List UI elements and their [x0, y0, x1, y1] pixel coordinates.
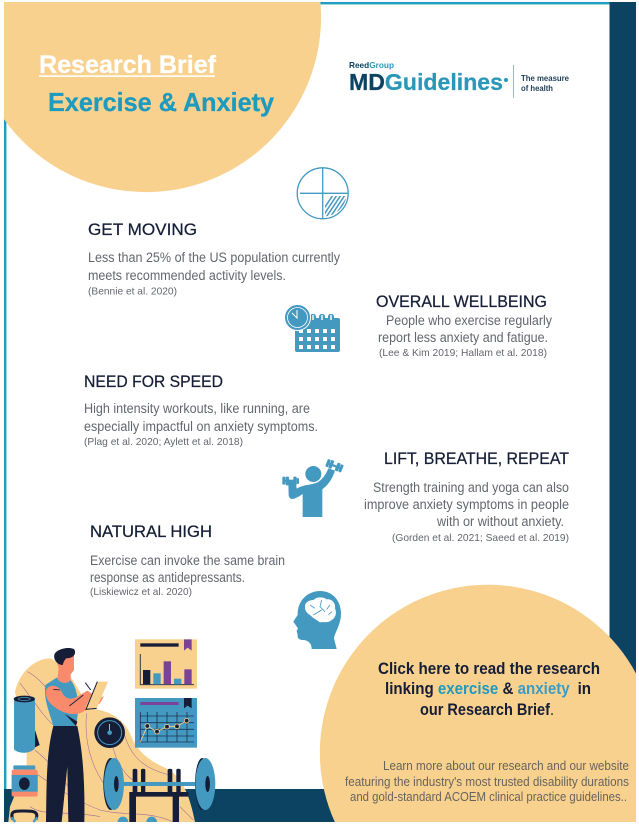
section: get moving: Less than 25% of the US population currently: [88, 250, 340, 265]
section: lift, breathe, repeat: improve anxiety symptoms in people: [364, 497, 569, 512]
section: lift, breathe, repeat: LIFT, BREATHE, REPEAT: [384, 449, 569, 468]
illustration: man with clipboard in gym: [8, 639, 215, 822]
section: get moving: [88, 220, 340, 298]
title: Research Brief: Research Brief: [39, 51, 217, 79]
call to action text: [378, 660, 600, 719]
section: overall wellbeing: [376, 292, 552, 359]
icon: quarter pie chart: [296, 167, 349, 220]
logo: ReedGroup MDGuidelines: MDGuidelines: [349, 69, 503, 95]
section: natural high: (Liskiewicz et al. 2020): [90, 586, 192, 598]
supplement jar: [12, 765, 38, 797]
section: natural high: response as antidepressants.: [90, 570, 245, 585]
yoga mat: [14, 696, 40, 753]
call to action text: Click here to read the research: [378, 660, 600, 678]
logo: ReedGroup MDGuidelines: The measure: [521, 74, 570, 83]
section: natural high: NATURAL HIGH: [90, 522, 212, 541]
man arm and face: [46, 655, 104, 714]
section: get moving: GET MOVING: [88, 220, 197, 239]
section: get moving: (Bennie et al. 2020): [88, 286, 177, 298]
section: need for speed: NEED FOR SPEED: [84, 372, 223, 391]
icon: calendar and clock: [284, 304, 340, 352]
section: need for speed: especially impactful on anxiety symptoms.: [84, 419, 318, 434]
kettlebell: [11, 811, 37, 822]
man shirt: [45, 678, 78, 726]
title: Exercise & Anxiety: Exercise & Anxiety: [48, 87, 275, 117]
call to action text: linking exercise & anxiety in: [385, 680, 591, 698]
section: get moving: meets recommended activity levels.: [88, 268, 286, 283]
icon: head with brain: [293, 591, 341, 649]
section: natural high: Exercise can invoke the same brain: [90, 553, 285, 568]
peach backdrop blob: [8, 658, 195, 822]
arm details: [53, 689, 83, 706]
section: lift, breathe, repeat: (Gorden et al. 2021; Saeed et al. 2019): [392, 532, 569, 544]
peach circle: call to action: [320, 585, 636, 822]
section: lift, breathe, repeat: with or without anxiety.: [436, 514, 564, 529]
section: natural high: [90, 522, 285, 598]
section: lift, breathe, repeat: Strength training and yoga can also: [373, 480, 569, 495]
section: overall wellbeing: People who exercise regularly: [386, 313, 552, 328]
man hair: [54, 648, 75, 665]
icon: person lifting dumbbells: [282, 459, 344, 517]
gauge clock: [94, 717, 125, 748]
man trousers: [46, 726, 84, 822]
closing text block: [345, 758, 629, 804]
section: overall wellbeing: OVERALL WELLBEING: [376, 292, 547, 311]
section: overall wellbeing: (Lee & Kim 2019; Hallam et al. 2018): [379, 347, 547, 359]
contour lines: [20, 672, 193, 822]
bar chart card: [135, 639, 197, 689]
section: lift, breathe, repeat: [364, 449, 569, 544]
section: need for speed: (Plag et al. 2020; Aylett et al. 2018): [84, 436, 243, 448]
logo: ReedGroup MDGuidelines: ReedGroup: [349, 60, 394, 70]
logo: ReedGroup MDGuidelines: [349, 60, 570, 98]
call to action text: our Research Brief.: [420, 701, 554, 719]
barbell on rack: [103, 758, 215, 822]
peach circle: header: [4, 2, 321, 192]
section: need for speed: [84, 372, 318, 448]
section: need for speed: High intensity workouts, like running, are: [84, 401, 310, 416]
logo: ReedGroup MDGuidelines: of health: [521, 84, 553, 93]
section: overall wellbeing: report less anxiety and fatigue.: [378, 330, 548, 345]
clipboard and pencil: [85, 682, 108, 709]
line chart card: [135, 698, 197, 748]
